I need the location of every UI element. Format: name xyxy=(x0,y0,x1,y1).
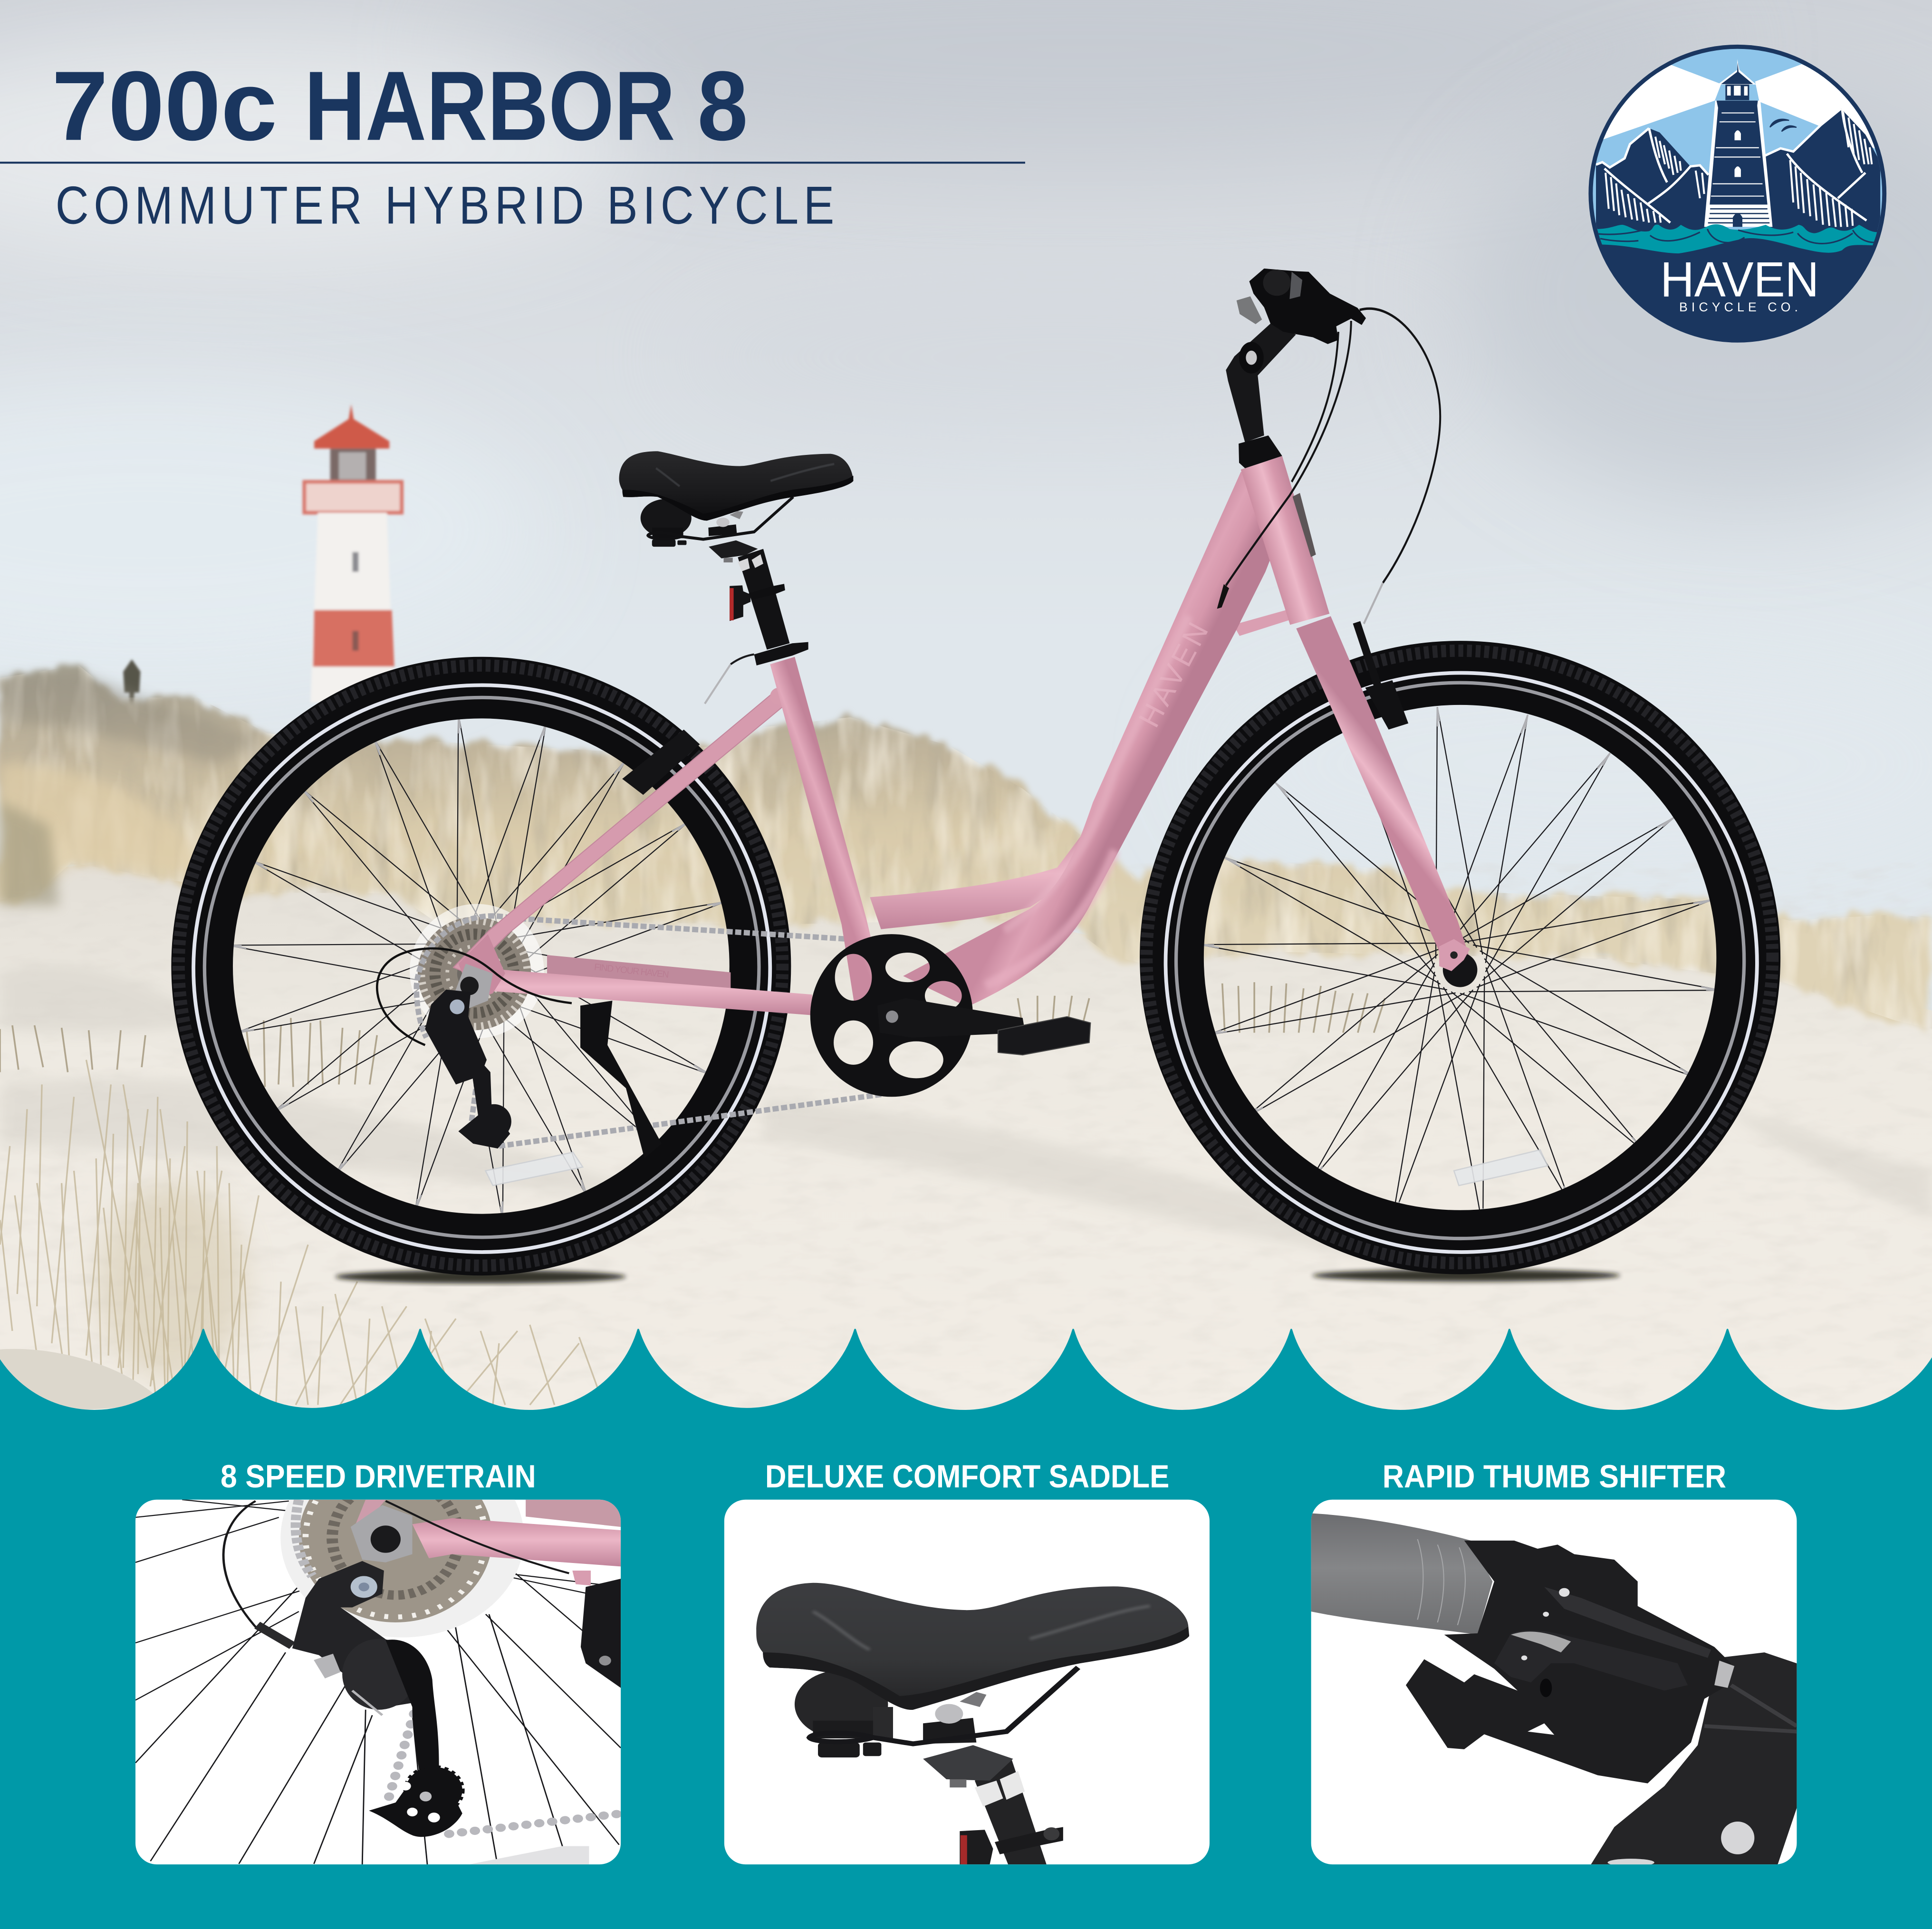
feature label: 8 speed drivetrain: 8 SPEED DRIVETRAIN xyxy=(221,1459,536,1495)
front brake xyxy=(1353,621,1408,730)
subtitle: COMMUTER HYBRID BICYCLE xyxy=(56,176,834,235)
spokes xyxy=(135,1500,621,1864)
downtube logotype: HAVEN xyxy=(1133,617,1215,733)
frame stay xyxy=(526,1500,621,1527)
shifter and brake lever xyxy=(1249,269,1366,344)
kickstand xyxy=(581,1579,621,1688)
shifter body xyxy=(1406,1541,1731,1784)
dropout xyxy=(351,1505,412,1562)
crank arm xyxy=(877,998,1025,1038)
logo tagline: BICYCLE CO. xyxy=(1679,300,1798,314)
reflector xyxy=(469,1846,589,1864)
seat stay xyxy=(453,690,785,974)
stem xyxy=(1226,324,1296,442)
rear light xyxy=(730,585,750,621)
headset xyxy=(1239,435,1282,468)
light beams xyxy=(1604,65,1721,140)
cassette xyxy=(280,1438,524,1638)
bicycle xyxy=(179,269,1772,1283)
spring ball xyxy=(795,1670,888,1738)
spring ball xyxy=(641,499,692,537)
rear cassette xyxy=(410,904,544,1038)
sign post on dune xyxy=(123,659,141,709)
head tube xyxy=(1241,456,1329,625)
main tube xyxy=(903,458,1294,1007)
title: 700c xyxy=(52,50,277,161)
rail xyxy=(648,497,793,539)
title xyxy=(52,50,748,161)
front wheel xyxy=(1146,651,1772,1263)
teal wave band xyxy=(0,1330,1932,1929)
title: HARBOR xyxy=(304,50,675,161)
chain xyxy=(416,916,882,1146)
seat tube xyxy=(770,657,890,1017)
dropout xyxy=(458,934,505,1001)
seat post xyxy=(738,549,789,650)
panel: drivetrain detail xyxy=(135,1438,623,1864)
dunes with beach grass xyxy=(0,666,1932,1029)
upper lever xyxy=(1494,1630,1688,1691)
cables xyxy=(1704,1685,1797,1732)
derailleur cable xyxy=(377,948,572,1045)
rear brake xyxy=(622,655,754,795)
chainstay tagline: FIND YOUR HAVEN xyxy=(594,962,670,980)
shift cable xyxy=(223,1501,569,1630)
head tube badge xyxy=(1293,493,1316,557)
seat clamp xyxy=(709,540,758,559)
seat post xyxy=(975,1759,1047,1864)
logo: Haven Bicycle Co. roundel xyxy=(1587,45,1889,366)
rear derailleur xyxy=(425,990,511,1148)
lighthouse xyxy=(304,404,402,703)
saddle shell xyxy=(619,451,853,521)
feature label: deluxe comfort saddle: DELUXE COMFORT SADDLE xyxy=(765,1459,1169,1495)
post band xyxy=(995,1827,1063,1854)
front hub xyxy=(1439,939,1477,987)
fork xyxy=(1296,616,1470,959)
pedal xyxy=(998,1017,1090,1055)
saddle xyxy=(756,1583,1189,1710)
chainring xyxy=(810,934,1090,1097)
cable end xyxy=(1217,584,1229,609)
reflectors xyxy=(485,1150,1548,1186)
handlebar, stem and cables xyxy=(1217,269,1440,624)
birds xyxy=(1770,119,1797,131)
seat stay joint xyxy=(770,688,788,705)
seatpost, saddle and rear light xyxy=(619,451,853,650)
grip end xyxy=(1237,296,1262,324)
clamp xyxy=(923,1745,1013,1781)
gusset xyxy=(1233,610,1290,636)
panel: thumb shifter detail xyxy=(1311,1500,1797,1866)
title: 8 xyxy=(697,50,748,161)
rear axle xyxy=(453,964,493,1011)
title rule xyxy=(0,162,1025,164)
feature label: rapid thumb shifter: RAPID THUMB SHIFTER xyxy=(1383,1459,1726,1495)
ground shadows xyxy=(335,1269,1620,1283)
stem and clamp xyxy=(1591,1652,1797,1864)
rail xyxy=(810,1668,1078,1744)
derailleur xyxy=(292,1561,416,1708)
rear light xyxy=(960,1830,993,1864)
panel: saddle detail xyxy=(724,1500,1210,1864)
background: sky and beach photograph xyxy=(0,0,1932,1417)
lighthouse xyxy=(1704,59,1772,227)
rear wheel xyxy=(179,666,782,1265)
sand xyxy=(0,860,1932,1417)
waves xyxy=(1596,224,1878,253)
frame xyxy=(453,456,1477,1017)
post labels xyxy=(738,554,763,571)
tufts behind the wheels xyxy=(0,982,1385,1087)
sand shadows xyxy=(0,965,1932,1282)
seat collar xyxy=(754,642,808,666)
kickstand xyxy=(580,1001,662,1158)
chain xyxy=(389,1714,623,1834)
labels xyxy=(975,1771,1025,1806)
mountains xyxy=(1596,128,1710,232)
rear axle nut xyxy=(460,977,479,995)
cross tube xyxy=(870,828,1099,929)
far chainstay xyxy=(547,955,731,990)
grip xyxy=(1311,1513,1492,1635)
foreground beach grass xyxy=(0,1060,604,1405)
cables xyxy=(1226,309,1440,586)
logo wordmark: HAVEN xyxy=(1660,251,1819,307)
chain stay xyxy=(483,964,816,1015)
